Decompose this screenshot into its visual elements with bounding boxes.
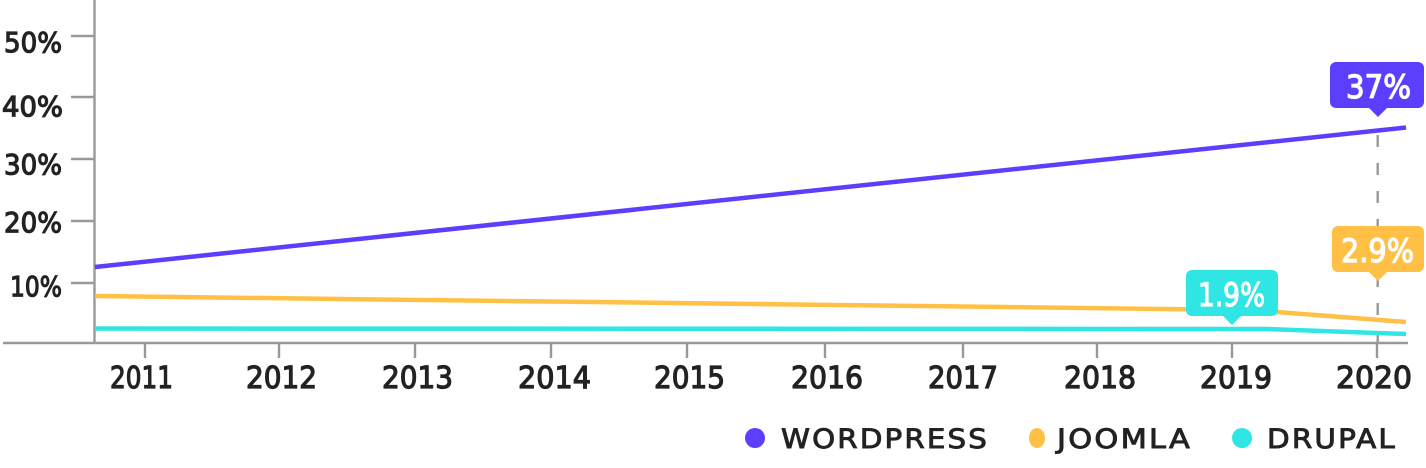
y axis labels: 50% [4, 26, 62, 59]
2020 dashed marker [1376, 135, 1379, 343]
x axis labels: 2013 [382, 361, 453, 396]
y axis labels: 40% [2, 90, 63, 123]
legend item: WordPress: WORDPRESS [781, 424, 989, 455]
x axis labels: 2019 [1200, 361, 1272, 396]
callout: Joomla 2.9% [1332, 226, 1424, 281]
callout: Drupal 1.9%: 1.9% [1198, 276, 1265, 314]
x axis labels: 2016 [791, 361, 863, 396]
callout: Drupal 1.9% [1186, 270, 1278, 325]
x axis labels: 2012 [246, 361, 317, 396]
legend item: Joomla: JOOMLA [1055, 424, 1192, 455]
legend [745, 424, 1397, 455]
y axis labels: 20% [4, 206, 62, 239]
x axis labels: 2014 [518, 361, 591, 396]
y axis labels [2, 26, 63, 303]
x axis labels: 2017 [928, 361, 998, 396]
Drupal line [95, 328, 1406, 334]
y axis [71, 0, 94, 343]
y axis labels: 30% [4, 148, 62, 181]
callout: WordPress 37%: 37% [1346, 68, 1411, 106]
Joomla line [95, 296, 1406, 322]
callout: Joomla 2.9%: 2.9% [1341, 232, 1414, 270]
x axis labels: 2015 [654, 361, 725, 396]
legend item: Drupal: DRUPAL [1267, 424, 1397, 455]
x axis labels: 2011 [110, 361, 173, 396]
y axis labels: 10% [10, 270, 62, 303]
x axis labels [110, 361, 1412, 396]
x axis labels: 2018 [1064, 361, 1136, 396]
x axis labels: 2020 [1336, 361, 1412, 396]
callout: WordPress 37% [1330, 62, 1424, 117]
WordPress line [95, 128, 1406, 267]
x axis [3, 343, 1408, 358]
